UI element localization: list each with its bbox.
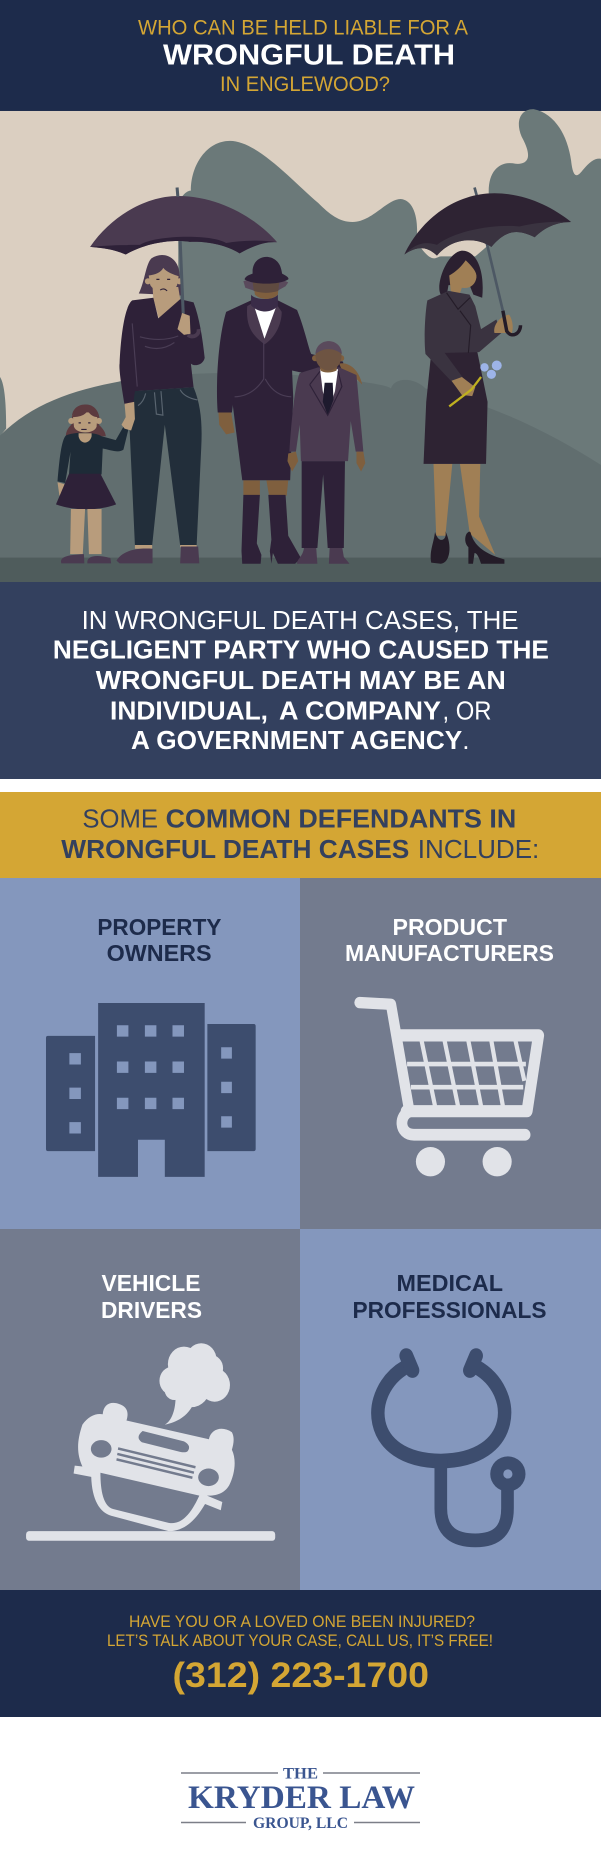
logo: The Kryder Law Group [181, 1766, 420, 1832]
heading line 2: INCLUDE: [418, 836, 539, 864]
statement line 4 [110, 697, 492, 725]
statement line 4: INDIVIDUAL, [110, 697, 268, 725]
title line 2: WRONGFUL DEATH [163, 39, 455, 71]
phone number: (312) 223-1700 [172, 1656, 429, 1695]
callout line 1: HAVE YOU OR A LOVED ONE BEEN INJURED? [129, 1612, 475, 1631]
icon: overturned car [26, 1343, 275, 1541]
ground [0, 558, 601, 584]
statement line 4: A COMPANY [279, 697, 441, 725]
heading line 2: WRONGFUL DEATH CASES [61, 836, 409, 864]
figure: girl [56, 404, 128, 563]
heading band: common defendants [0, 792, 601, 878]
label [101, 1270, 202, 1323]
label: PRODUCT [392, 914, 507, 940]
statement line 3: WRONGFUL DEATH MAY BE AN [96, 667, 506, 695]
icon: mother umbrella [90, 188, 277, 336]
panel: medical professionals [300, 1229, 601, 1590]
figure: woman with flowers [424, 251, 513, 564]
label [345, 914, 554, 966]
label [97, 914, 221, 966]
logo: The Kryder Law Group: THE [283, 1766, 318, 1782]
label: MEDICAL [396, 1270, 503, 1296]
label [352, 1270, 546, 1323]
heading line 1: SOME [82, 806, 158, 834]
header banner [0, 0, 601, 111]
figure: boy in suit [287, 341, 365, 564]
label: PROPERTY [97, 914, 221, 940]
label: VEHICLE [102, 1270, 200, 1296]
label: PROFESSIONALS [352, 1297, 546, 1323]
icon: smoke cloud [159, 1343, 230, 1425]
panel: negligent party statement [0, 582, 601, 779]
icon: buildings [46, 1003, 256, 1177]
statement line 5: A GOVERNMENT AGENCY . [131, 727, 470, 755]
icon: stethoscope [378, 1356, 526, 1540]
figure: mother with umbrella [117, 255, 205, 563]
title line 3: IN ENGLEWOOD? [220, 73, 390, 96]
label: MANUFACTURERS [345, 940, 554, 966]
statement line 2: NEGLIGENT PARTY WHO CAUSED THE [53, 637, 549, 665]
panel: vehicle drivers [0, 1229, 300, 1590]
icon: shopping cart [360, 1003, 539, 1176]
icon: right umbrella [404, 188, 571, 335]
background hills and trees [178, 109, 601, 559]
call to action banner [0, 1590, 601, 1717]
panel: property owners [0, 878, 300, 1229]
illustration: mourners under umbrellas [0, 109, 601, 584]
statement line 1: IN WRONGFUL DEATH CASES, THE [82, 607, 519, 635]
statement line 4: , OR [442, 697, 492, 725]
figure: woman in hat [217, 257, 362, 564]
logo: The Kryder Law Group: KRYDER LAW [188, 1780, 415, 1816]
logo: The Kryder Law Group: GROUP, LLC [253, 1815, 348, 1832]
title line 1: WHO CAN BE HELD LIABLE FOR A [138, 16, 468, 39]
heading line 1: COMMON DEFENDANTS IN [166, 806, 516, 834]
panel: product manufacturers [300, 878, 601, 1229]
label: DRIVERS [101, 1297, 202, 1323]
callout line 2: LET’S TALK ABOUT YOUR CASE, CALL US, IT’S FREE! [107, 1631, 493, 1650]
label: OWNERS [107, 940, 212, 966]
